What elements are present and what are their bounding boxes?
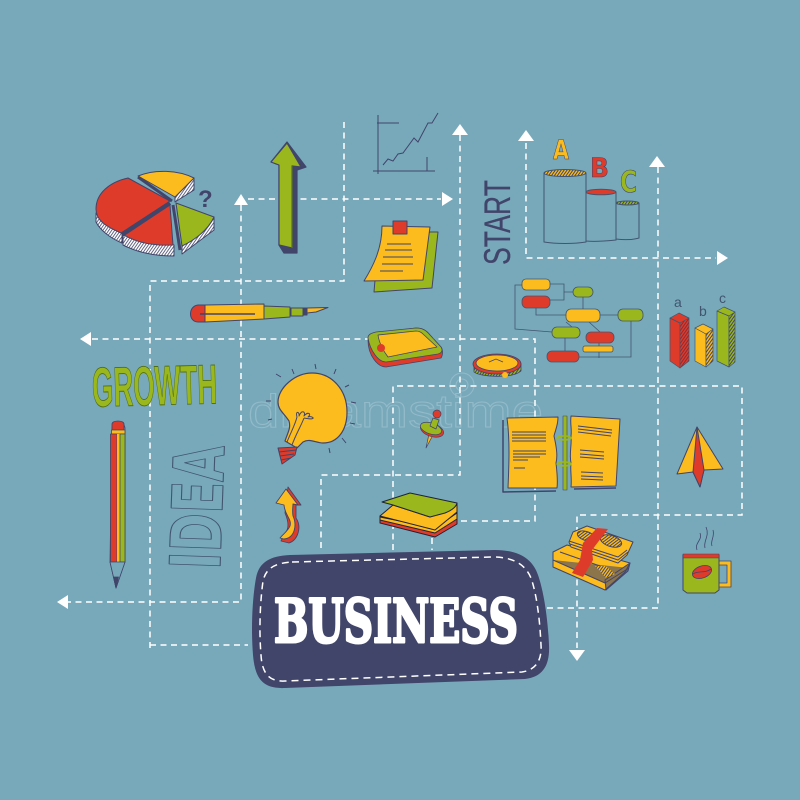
icon: sticky notes	[364, 221, 438, 292]
flowchart	[515, 279, 643, 362]
icon: question mark: ?	[198, 186, 213, 213]
icon: open binder	[503, 416, 620, 492]
icon: light bulb	[266, 364, 356, 464]
chart: 3D bars a b c: b	[699, 303, 707, 319]
chart: cylinders A B C	[544, 135, 639, 244]
icon: coffee mug	[683, 527, 731, 593]
chart: 3D bars a b c: c	[719, 290, 726, 306]
arrowheads	[57, 124, 728, 661]
icon: coin stack	[473, 354, 521, 378]
watermark: dreamstime	[248, 385, 543, 437]
badge: BUSINESS	[252, 550, 549, 688]
watermark	[248, 373, 543, 437]
infographic canvas: GROWTH	[91, 352, 218, 419]
text: START: START	[477, 180, 518, 265]
icon: curved arrow	[276, 487, 301, 543]
chart: 3D bars a b c: a	[674, 294, 682, 310]
icon: folded note stack	[380, 493, 457, 537]
chart: 3D bars a b c	[670, 290, 735, 368]
icon: pencil	[110, 421, 125, 588]
icon: fountain pen	[190, 304, 328, 322]
dashed connector network	[68, 122, 742, 651]
icon: pie chart	[96, 171, 214, 256]
text: IDEA: IDEA	[155, 444, 241, 571]
chart: cylinders A B C: C	[620, 165, 637, 199]
icon: paper plane	[677, 427, 723, 487]
chart: cylinders A B C: B	[590, 153, 609, 184]
icon: up arrow	[271, 142, 306, 253]
icon: tablet	[368, 328, 442, 367]
icon: push pin	[419, 410, 445, 448]
chart: cylinders A B C: A	[553, 135, 569, 166]
line chart	[373, 113, 438, 174]
icon: money stacks	[553, 526, 633, 590]
heading: BUSINESS: BUSINESS	[274, 587, 518, 657]
